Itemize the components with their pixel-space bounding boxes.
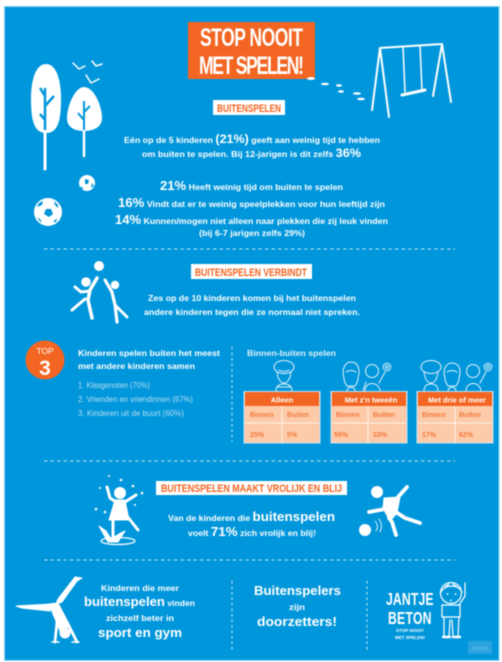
title: MET SPELEN! xyxy=(199,51,304,80)
text block: top 3 list: 2. Vrienden en vriendinnen (67%) xyxy=(78,395,193,404)
icon: children playing with ball xyxy=(72,261,127,322)
text block: top 3 list xyxy=(78,348,220,418)
table: met drie of meer: 17% xyxy=(422,432,437,439)
text block: intro xyxy=(124,132,380,160)
title xyxy=(188,22,315,80)
logo: jantje beton xyxy=(386,590,434,640)
icon: birds xyxy=(73,61,102,83)
table: met drie of meer: Buiten xyxy=(459,412,481,419)
text block: sport en gym: Kinderen die meer xyxy=(101,583,180,593)
text block: sport en gym xyxy=(84,583,195,640)
text block: doorzetters: Buitenspelers xyxy=(254,583,341,598)
text block: top 3 list: met andere kinderen samen xyxy=(78,361,195,371)
text block: doorzetters: doorzetters! xyxy=(257,614,337,629)
logo: jantje beton: BETON xyxy=(388,609,432,629)
icon: child alone xyxy=(274,360,294,391)
text block: top 3 list: Kinderen spelen buiten het meest xyxy=(78,348,220,358)
heading: buitenspelen verbindt xyxy=(191,264,312,279)
heading: buitenspelen xyxy=(213,100,285,115)
text block: statistics: 16% Vindt dat er te weinig speelplekken voor hun leeftijd zijn xyxy=(118,196,385,210)
icon: two children xyxy=(343,362,391,391)
text block: doorzetters: zijn xyxy=(289,602,305,612)
text block: sport en gym: sport en gym xyxy=(98,625,182,640)
icon: child kicking ball xyxy=(359,486,420,536)
icon: child doing cartwheel xyxy=(16,577,82,642)
table: alleen: 5% xyxy=(287,432,298,439)
table: alleen: 25% xyxy=(250,432,265,439)
text block: vrolijk: voelt 71% zich vrolijk en blij! xyxy=(188,524,316,539)
watermark: miro xyxy=(468,641,492,654)
icon: small ball xyxy=(79,175,95,191)
text block: vrolijk xyxy=(168,509,335,539)
table: alleen: Binnen xyxy=(250,412,274,419)
text block: top 3 list: 3. Kinderen uit de buurt (60%) xyxy=(78,409,184,418)
table: met z'n tweeën xyxy=(331,392,407,443)
text block: statistics: (bij 6-7 jarigen zelfs 29%) xyxy=(199,229,305,238)
table: met drie of meer: 62% xyxy=(459,432,474,439)
heading: buitenspelen maakt vrolijk en blij: BUITENSPELEN MAAKT VROLIJK EN BLIJ xyxy=(161,483,342,495)
icon: large ball xyxy=(34,198,62,226)
text block: verbindt: andere kinderen tegen die ze normaal niet spreken. xyxy=(144,307,360,317)
icon: three children xyxy=(421,360,492,391)
title: STOP NOOIT xyxy=(200,23,303,52)
table: alleen: Alleen xyxy=(271,396,294,404)
table: met z'n tweeën: Met z'n tweeën xyxy=(345,396,398,404)
table: met z'n tweeën: 59% xyxy=(334,432,349,439)
text block: top 3 list: 1. Klasgenoten (70%) xyxy=(78,381,150,390)
text block: statistics: 14% Kunnen/mogen niet alleen naar plekken die zij leuk vinden xyxy=(115,213,388,227)
text block: vrolijk: Van de kinderen die buitenspelen xyxy=(168,509,335,524)
heading: binnen-buiten spelen: Binnen-buiten spelen xyxy=(247,348,336,358)
text block: verbindt: Zes op de 10 kinderen komen bij het buitenspelen xyxy=(148,293,356,303)
text block: verbindt xyxy=(144,293,360,317)
heading: buitenspelen verbindt: BUITENSPELEN VERBINDT xyxy=(195,267,307,279)
text block: sport en gym: buitenspelen vinden xyxy=(84,594,195,609)
table: met z'n tweeën: Buiten xyxy=(373,412,395,419)
badge: top 3: TOP xyxy=(36,346,54,356)
table: met drie of meer xyxy=(417,392,493,443)
footsteps xyxy=(307,77,365,100)
text block: intro: Eén op de 5 kinderen (21%) geeft aan weinig tijd te hebben xyxy=(124,132,380,146)
text block: statistics xyxy=(115,179,388,238)
table: met drie of meer: Binnen xyxy=(422,412,446,419)
icon: child splashing in puddle xyxy=(95,475,143,544)
text block: intro: om buiten te spelen. Bij 12-jarigen is dit zelfs 36% xyxy=(142,146,361,160)
watermark: miro: miro xyxy=(473,644,487,652)
badge: top 3 xyxy=(26,340,64,380)
table: met z'n tweeën: Binnen xyxy=(336,412,360,419)
badge: top 3: 3 xyxy=(39,357,51,380)
text block: sport en gym: zichzelf beter in xyxy=(106,613,174,623)
icon: swing xyxy=(372,44,451,117)
table: met z'n tweeën: 33% xyxy=(373,432,388,439)
table: met drie of meer: Met drie of meer xyxy=(428,396,486,404)
text block: statistics: 21% Heeft weinig tijd om buiten te spelen xyxy=(160,179,343,193)
icon: jantje character xyxy=(440,582,465,637)
heading: buitenspelen: BUITENSPELEN xyxy=(217,103,281,115)
table: alleen: Buiten xyxy=(287,412,309,419)
table: alleen xyxy=(244,392,320,443)
logo: jantje beton: JANTJE xyxy=(386,590,434,610)
icon: trees xyxy=(31,64,102,169)
logo: jantje beton: STOP NOOIT xyxy=(396,628,424,633)
text block: doorzetters xyxy=(254,583,341,629)
logo: jantje beton: MET SPELEN! xyxy=(395,635,425,640)
